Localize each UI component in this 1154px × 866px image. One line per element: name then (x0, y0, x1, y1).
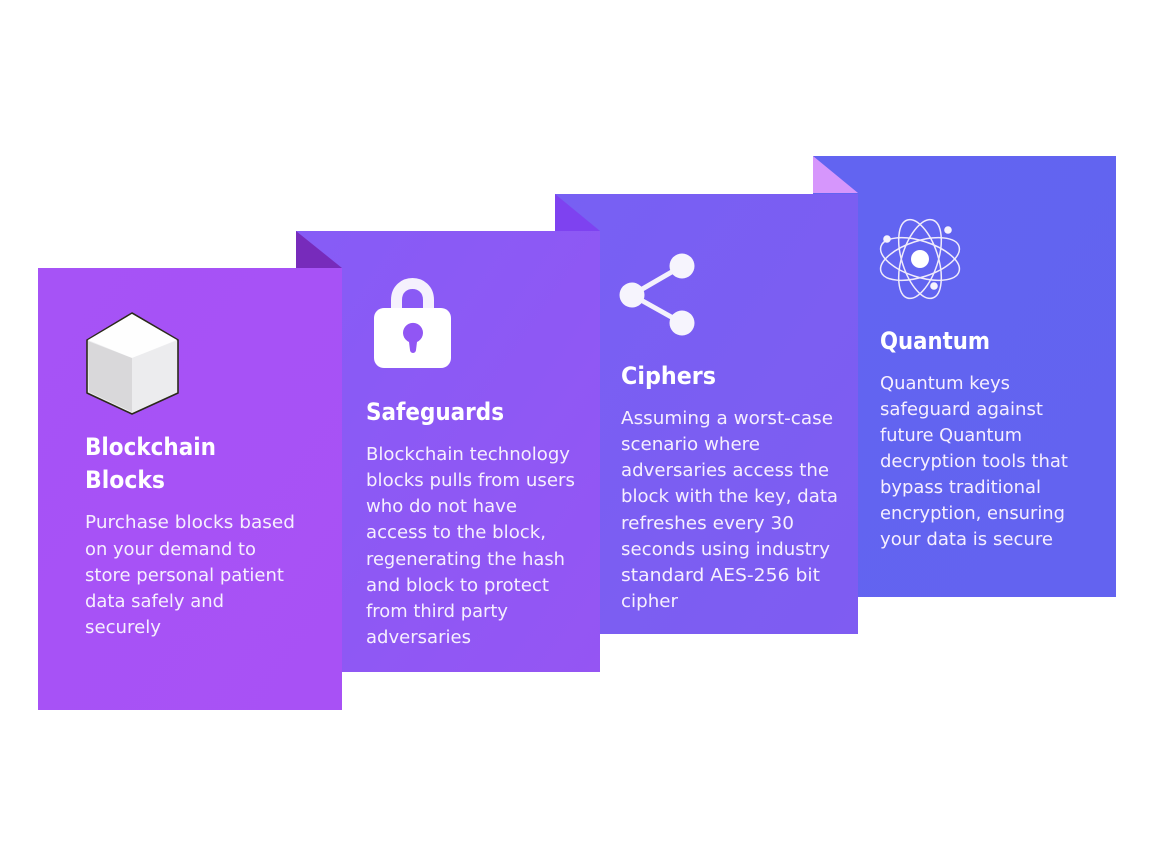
text: safeguards body: regenerating the hash (366, 549, 565, 570)
text: ciphers body: seconds using industry (621, 539, 830, 560)
text: blockchain blocks body: on your demand to (85, 539, 256, 560)
text: safeguards body: access to the block, (366, 522, 546, 543)
text: ciphers body: adversaries access the (621, 460, 829, 481)
text: blockchain blocks body: data safely and (85, 591, 224, 612)
heading: blockchain blocks: Blockchain (85, 433, 216, 461)
text: ciphers body: block with the key, data (621, 486, 838, 507)
heading: ciphers: Ciphers (621, 362, 716, 390)
heading: blockchain blocks (85, 433, 216, 494)
text: ciphers body: refreshes every 30 (621, 513, 794, 534)
icon: share (620, 254, 694, 336)
text: blockchain blocks body: securely (85, 617, 161, 638)
text: quantum body: encryption, ensuring (880, 503, 1065, 524)
text: ciphers body: standard AES-256 bit (621, 565, 820, 586)
text: quantum body: your data is secure (880, 529, 1053, 550)
text: quantum body: safeguard against (880, 399, 1043, 420)
text: quantum body (880, 373, 1068, 550)
text: quantum body: future Quantum (880, 425, 1022, 446)
text: ciphers body: Assuming a worst-case (621, 408, 833, 429)
panel: blockchain blocks (38, 268, 342, 710)
icon: atom (875, 214, 965, 304)
fold: ciphers corner (555, 194, 600, 231)
fold: quantum corner (813, 156, 858, 193)
text: ciphers body: cipher (621, 591, 679, 612)
heading: safeguards: Safeguards (366, 398, 504, 426)
heading: blockchain blocks: Blocks (85, 466, 165, 494)
text: blockchain blocks body: Purchase blocks based (85, 512, 295, 533)
icon: cube (87, 313, 178, 414)
panel: safeguards (296, 231, 600, 672)
fold: safeguards corner (296, 231, 342, 268)
panel: ciphers (555, 194, 858, 634)
text: quantum body: Quantum keys (880, 373, 1010, 394)
text: safeguards body: Blockchain technology (366, 444, 570, 465)
text: quantum body: decryption tools that (880, 451, 1068, 472)
text: quantum body: bypass traditional (880, 477, 1041, 498)
text: safeguards body: adversaries (366, 627, 471, 648)
heading: quantum: Quantum (880, 327, 990, 355)
text: ciphers body: scenario where (621, 434, 760, 455)
text: safeguards body (366, 444, 575, 648)
text: safeguards body: who do not have (366, 496, 517, 517)
icon: padlock (374, 284, 451, 368)
text: ciphers body (621, 408, 838, 612)
panel: quantum (813, 156, 1116, 597)
text: blockchain blocks body (85, 512, 295, 638)
text: blockchain blocks body: store personal patient (85, 565, 284, 586)
text: safeguards body: and block to protect (366, 575, 549, 596)
text: safeguards body: blocks pulls from users (366, 470, 575, 491)
text: safeguards body: from third party (366, 601, 508, 622)
